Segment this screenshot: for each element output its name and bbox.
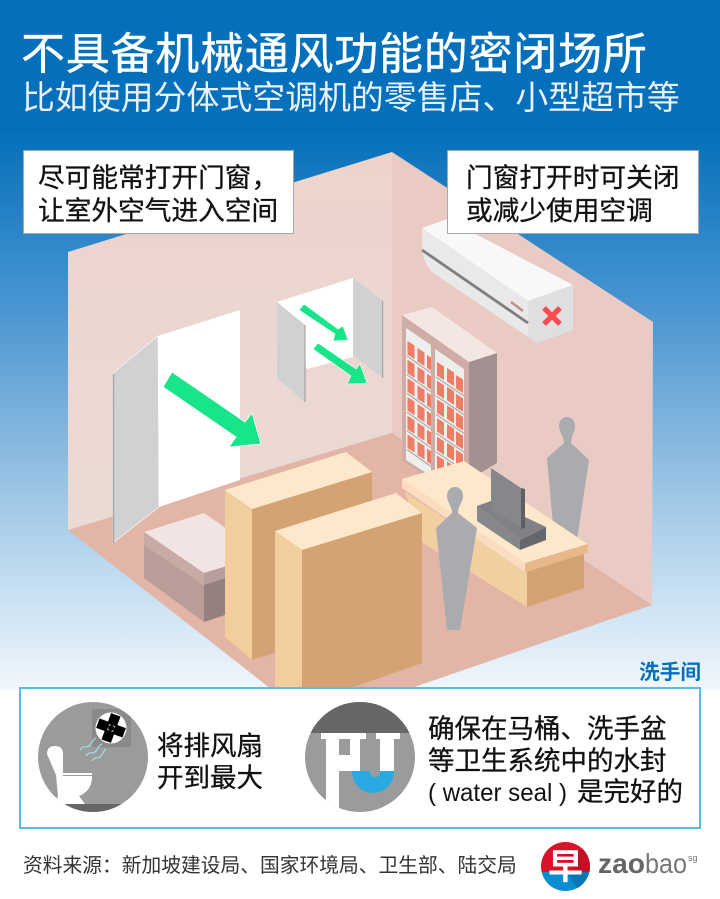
air conditioner [422, 219, 573, 343]
window with leaves [277, 278, 383, 402]
title: 不具备机械通风功能的密闭场所 [21, 30, 648, 79]
text: water seal intact: 等卫生系统中的水封 [428, 746, 666, 776]
room illustration [68, 152, 653, 692]
washroom label: 洗手间 [639, 661, 701, 684]
icon: toilet and exhaust fan [38, 702, 148, 814]
logo: zaobao: zao [598, 848, 645, 879]
text: water seal intact: ( water seal ) [428, 779, 567, 807]
text: turn exhaust fan to max [157, 731, 263, 793]
tall box front [275, 493, 422, 692]
door with leaf [113, 310, 240, 543]
title [21, 30, 680, 116]
person in front of counter [436, 487, 477, 630]
cash register [477, 468, 546, 550]
source note: 资料来源：新加坡建设局、国家环境局、卫生部、陆交局 [23, 855, 517, 877]
counter [402, 461, 588, 607]
text: water seal intact: 是完好的 [577, 777, 683, 807]
icon: water seal pipe [305, 702, 415, 815]
logo: zaobao: 早 [548, 839, 583, 890]
display shelf [402, 307, 497, 490]
logo: zaobao [541, 839, 698, 892]
callout: open doors and windows: 让室外空气进入空间 [38, 196, 278, 226]
text: water seal intact [428, 714, 683, 807]
text: water seal intact: 确保在马桶、洗手盆 [428, 714, 666, 744]
arrow: window airflow bottom [313, 343, 367, 384]
person behind counter [547, 417, 589, 540]
subtitle: 比如使用分体式空调机的零售店、小型超市等 [22, 79, 680, 116]
arrow: window airflow top [299, 304, 348, 341]
callout: reduce air conditioning: 或减少使用空调 [466, 196, 653, 226]
callout: open doors and windows: 尽可能常打开门窗， [38, 163, 278, 193]
logo: zaobao: bao [645, 848, 687, 879]
left wall [68, 152, 392, 530]
low box [144, 513, 240, 622]
background gradient [0, 0, 720, 690]
floor [68, 433, 652, 692]
text: turn exhaust fan to max: 开到最大 [157, 763, 263, 793]
arrow: door airflow [163, 372, 261, 447]
logo: zaobao: sg [688, 853, 698, 863]
text: turn exhaust fan to max: 将排风扇 [157, 731, 263, 761]
callout: reduce air conditioning [448, 150, 698, 234]
panel: washroom advice [20, 688, 700, 828]
right wall [392, 152, 653, 605]
callout: reduce air conditioning: 门窗打开时可关闭 [466, 163, 680, 193]
tall box rear [225, 452, 372, 660]
callout: open doors and windows [24, 150, 294, 234]
icon: red cross off [544, 308, 560, 324]
